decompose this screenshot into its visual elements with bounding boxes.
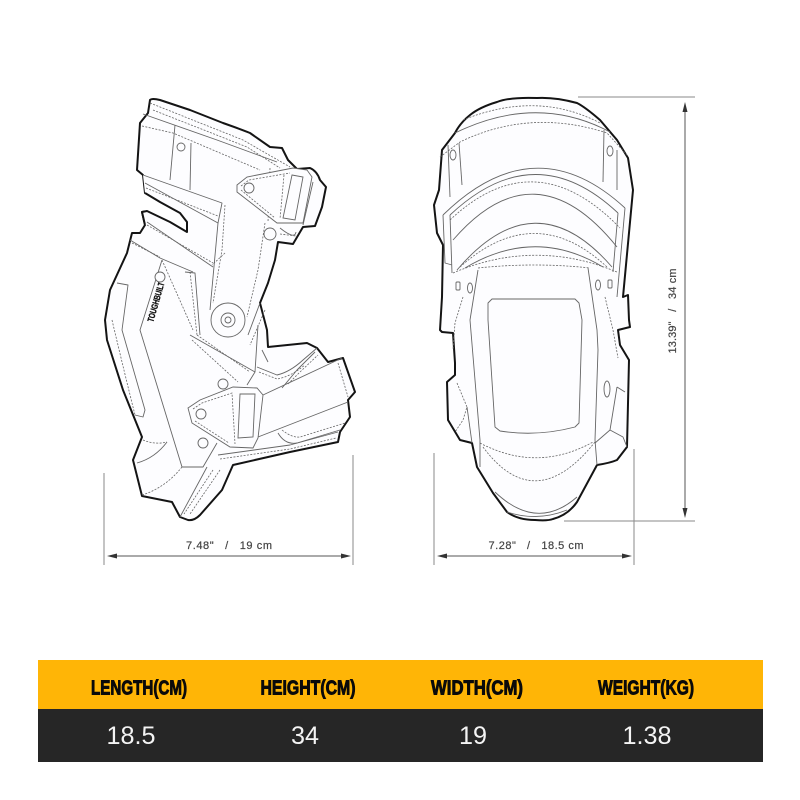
table header bar: HEIGHT(CM) [260, 678, 356, 700]
lower strap and pad [257, 348, 348, 443]
lower buckle [188, 379, 263, 448]
table values row [38, 709, 763, 762]
upper buckle [237, 168, 313, 240]
table values row: 34 [291, 722, 319, 750]
front view outline [434, 98, 633, 520]
table values row: 1.38 [622, 722, 672, 750]
upper cuff stitching [130, 103, 290, 272]
table header bar [38, 660, 763, 709]
side view outline [105, 99, 355, 520]
side view width dimension: 7.48" / 19 cm [186, 540, 272, 552]
table values row: 19 [459, 722, 487, 750]
table header bar: LENGTH(CM) [91, 678, 187, 700]
front view height dimension: 13.39" / 34 cm [667, 268, 679, 354]
notch bold edge [142, 193, 187, 232]
shell rivet [155, 272, 165, 282]
front view height dimension [564, 97, 695, 521]
kneecap top band [440, 106, 627, 157]
small slots and rivets [456, 280, 612, 397]
brand logo: TOUGHBUILT [146, 281, 167, 323]
table header bar: WEIGHT(KG) [598, 678, 694, 700]
gel cap inset panel [488, 299, 582, 433]
specification table [38, 660, 763, 762]
front view width dimension [434, 449, 634, 565]
side view width dimension [104, 455, 353, 565]
front view width dimension: 7.28" / 18.5 cm [488, 540, 584, 552]
hinge arm [210, 168, 270, 345]
upper straps with rivets [448, 130, 617, 197]
arched bands [443, 168, 625, 297]
side tabs lower [455, 383, 627, 447]
leg notch gap [142, 175, 222, 262]
table header bar: WIDTH(CM) [431, 678, 523, 700]
lower cap stitching [480, 442, 595, 517]
kneecap plate edges [453, 268, 618, 467]
pivot joint [211, 303, 245, 337]
front view knee pad illustration [434, 98, 633, 520]
table values row: 18.5 [106, 722, 156, 750]
shell panel lines [112, 260, 338, 517]
side view knee pad illustration [105, 99, 355, 520]
